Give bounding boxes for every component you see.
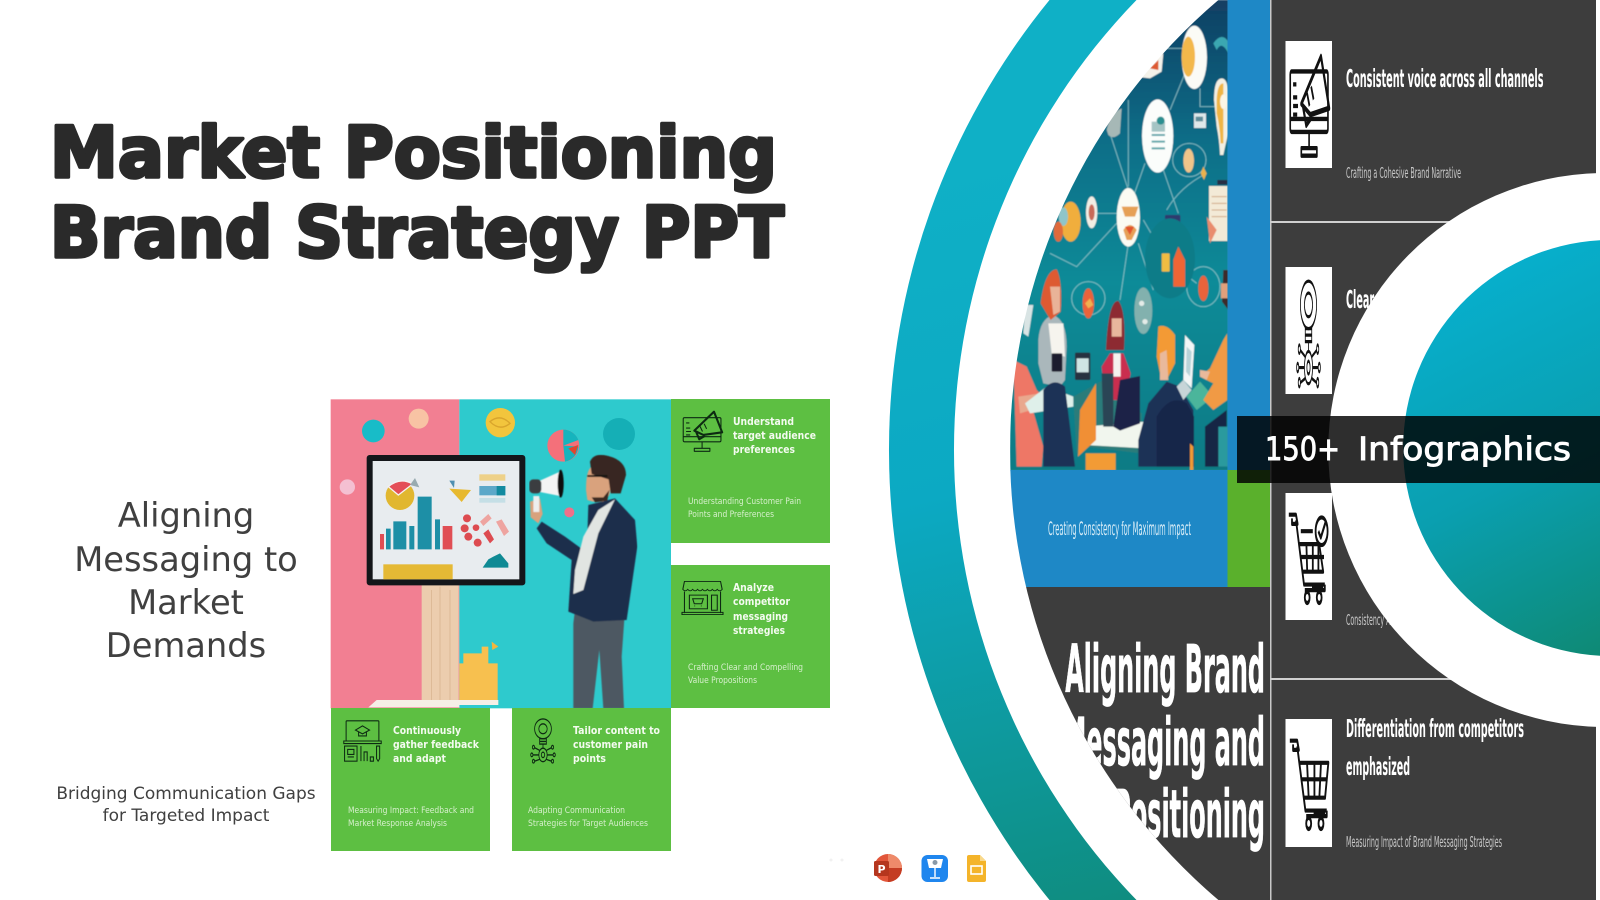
panel: clipped content circle: Consistency Across Touchpoints [1346, 611, 1446, 629]
dark panel with heading: Messaging and [1063, 704, 1265, 781]
dark panel with heading [1000, 587, 1270, 900]
outer teal ring [889, 0, 1136, 900]
card: understand target audience [671, 399, 830, 543]
banner: 150+ infographics: 150+ [1265, 430, 1340, 468]
icon: powerpoint [874, 854, 902, 882]
man figure [529, 455, 637, 708]
card: tailor content [512, 708, 671, 851]
card: understand target audience: target audience [733, 429, 816, 442]
subheading: bridging communication gaps [56, 784, 316, 826]
card: tailor content: Adapting Communication [528, 806, 625, 816]
icon: monitor megaphone [683, 412, 722, 451]
dark panel with heading: Aligning Brand [1065, 631, 1265, 708]
heading: aligning messaging to market demands: Demands [106, 626, 266, 665]
card: analyze competitor messaging: messaging [733, 610, 788, 623]
heading: aligning messaging to market demands: Aligning [118, 496, 254, 535]
card: analyze competitor messaging [671, 565, 830, 708]
card: analyze competitor messaging: strategies [733, 624, 785, 637]
card: analyze competitor messaging: Value Propositions [688, 676, 758, 686]
card: tailor content: points [573, 752, 606, 765]
icon: cart with check [1289, 515, 1328, 603]
card: understand target audience: Understand [733, 415, 794, 428]
dark panel with heading: Positioning [1113, 776, 1265, 853]
illustration: team meeting network [1010, 0, 1228, 471]
icon: monitor megaphone [1290, 56, 1329, 156]
title [50, 112, 784, 274]
list item: clear value [1286, 267, 1374, 394]
icon: education laptop [344, 721, 381, 761]
panel: clipped content circle: Creating Consistency for Maximum Impact [1048, 518, 1191, 540]
panel: dark list background [1270, 0, 1596, 900]
panel: clipped content circle [1000, 0, 1596, 900]
icon: keynote [922, 855, 948, 882]
green block [1228, 470, 1270, 587]
icon: google slides [967, 855, 986, 882]
white inner circle [1328, 173, 1600, 727]
subheading: bridging communication gaps: Bridging Communication Gaps [56, 784, 316, 804]
banner: 150+ infographics [1237, 416, 1600, 483]
list item: differentiation [1286, 714, 1524, 851]
card: tailor content: Strategies for Target Audiences [528, 819, 649, 829]
card: understand target audience: preferences [733, 443, 795, 456]
heading: aligning messaging to market demands: Messaging to [74, 540, 298, 579]
icon: powerpoint: P [878, 863, 886, 876]
icon: lightbulb network [531, 719, 555, 763]
card: understand target audience: Points and Preferences [688, 510, 775, 520]
card: continuously gather feedback [331, 708, 490, 851]
banner: 150+ infographics: Infographics [1358, 430, 1571, 468]
list item: consistency [1286, 493, 1390, 628]
subheading: bridging communication gaps: for Targeted Impact [103, 806, 270, 826]
blue strip [1228, 0, 1270, 470]
teal disc [1403, 240, 1600, 656]
card: continuously gather feedback: and adapt [393, 752, 446, 765]
icon: lightbulb network [1297, 281, 1320, 387]
blue caption panel [1010, 470, 1228, 587]
card: continuously gather feedback: Market Response Analysis [348, 819, 448, 829]
title: Market Positioning [50, 112, 777, 194]
title: Brand Strategy PPT [50, 192, 784, 274]
heading: aligning messaging to market demands [74, 496, 298, 665]
card: tailor content: Tailor content to [573, 724, 660, 737]
list item: differentiation: emphasized [1346, 752, 1410, 781]
photo panel: man with megaphone and display [331, 399, 671, 708]
software icons [830, 854, 986, 882]
card: continuously gather feedback: Continuously [393, 724, 461, 737]
card: continuously gather feedback: Measuring Impact: Feedback and [348, 806, 474, 816]
list item: consistent voice [1286, 41, 1544, 182]
heading: aligning messaging to market demands: Market [128, 583, 244, 622]
icon: storefront [682, 581, 723, 615]
card: continuously gather feedback: gather feedback [393, 738, 480, 751]
card: analyze competitor messaging: Analyze [733, 581, 774, 594]
icon: shopping cart [1290, 741, 1328, 829]
card: analyze competitor messaging: Crafting Clear and Compelling [688, 663, 803, 673]
card: understand target audience: Understanding Customer Pain [688, 497, 801, 507]
card: tailor content: customer pain [573, 738, 648, 751]
card: analyze competitor messaging: competitor [733, 595, 790, 608]
